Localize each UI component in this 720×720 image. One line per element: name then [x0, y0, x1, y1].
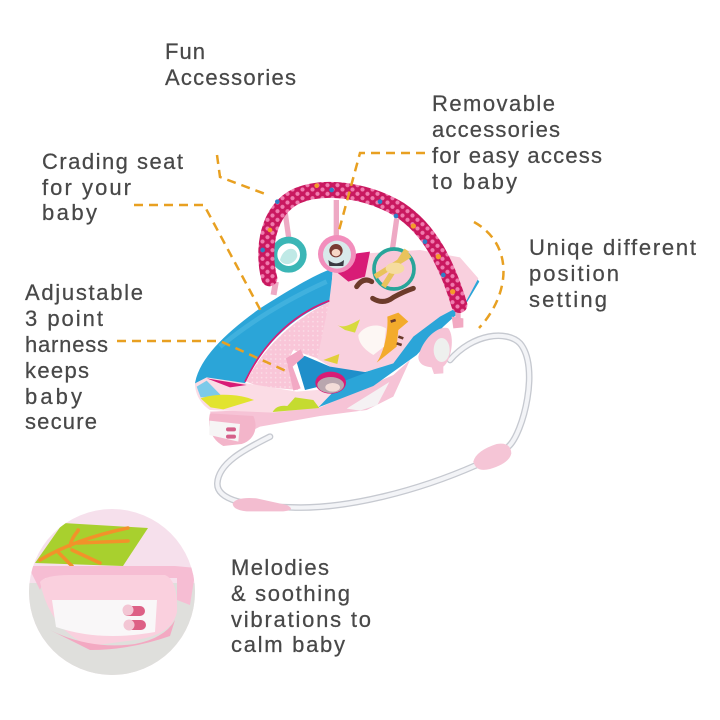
giraffe print: [323, 313, 408, 364]
rattle ring toy: [374, 249, 414, 289]
brown monkey print: [357, 280, 413, 301]
grey background: [29, 583, 195, 675]
dashed callout: cradling seat: [134, 205, 262, 313]
label: Removable accessories: to baby: [432, 169, 517, 194]
blue seat pad: [195, 268, 333, 392]
label: Melodies and vibrations: [231, 555, 371, 657]
fabric hem: [28, 566, 196, 605]
label: Cradling seat: for your: [42, 175, 131, 200]
leaf print: [35, 523, 148, 566]
label: Adjustable harness: 3 point: [25, 306, 103, 331]
dashed callout: fun accessories: [217, 155, 268, 195]
label: Adjustable harness: [25, 280, 143, 434]
label: Melodies and vibrations: Melodies: [231, 555, 329, 580]
dashed callout: position setting: [474, 222, 504, 328]
label: Adjustable harness: Adjustable: [25, 280, 143, 305]
arch coloured dots: [260, 183, 455, 294]
side hub: [418, 317, 463, 374]
white panel: [52, 600, 157, 636]
monkey disc toy: [318, 235, 356, 273]
label: Adjustable harness: baby: [25, 384, 82, 409]
blue right rim: [318, 270, 479, 407]
label: Melodies and vibrations: & soothing: [231, 581, 350, 606]
label: Removable accessories: Removable: [432, 91, 555, 116]
label: Cradling seat: baby: [42, 200, 97, 225]
teal ring toy: [274, 240, 303, 269]
label: Removable accessories: for easy access: [432, 143, 602, 168]
mesh seat panel: [246, 302, 329, 390]
dashed callout: harness: [117, 341, 286, 371]
front printed edge: [195, 377, 337, 413]
illustration: baby bouncer: [195, 183, 529, 511]
slider switches: [123, 606, 145, 616]
label: Fun Accessories: [165, 39, 296, 90]
pink seat center: [317, 250, 478, 377]
label: Fun Accessories: Accessories: [165, 65, 296, 90]
foot pad: [233, 498, 291, 511]
harness pad: [295, 356, 367, 390]
label: Position setting: position: [529, 261, 619, 286]
label: Cradling seat: Crading seat: [42, 149, 183, 174]
label: Adjustable harness: keeps: [25, 358, 89, 383]
label: Position setting: Uniqe different: [529, 235, 696, 260]
label: Position setting: setting: [529, 287, 607, 312]
label: Fun Accessories: Fun: [165, 39, 205, 64]
seat underside: [210, 360, 410, 445]
label: Adjustable harness: harness: [25, 332, 108, 357]
front control box: [209, 413, 256, 446]
magenta print: [337, 252, 370, 282]
arch hanging straps: [271, 200, 461, 322]
monkey face pad: [315, 372, 346, 394]
inset: control panel close-up: [29, 509, 195, 675]
label: Cradling seat: [42, 149, 183, 225]
label: Adjustable harness: secure: [25, 409, 97, 434]
label: Melodies and vibrations: vibrations to: [231, 607, 371, 632]
label: Position setting: [529, 235, 696, 312]
padded arch: [266, 190, 459, 305]
wire grip: [473, 444, 511, 470]
label: Removable accessories: [432, 91, 602, 194]
control housing: [40, 575, 177, 646]
dashed callout: removable accessories: [338, 153, 425, 234]
label: Melodies and vibrations: calm baby: [231, 632, 345, 657]
label: Removable accessories: accessories: [432, 117, 560, 142]
bouncer wire frame: [217, 336, 529, 508]
seam line: [245, 301, 329, 382]
